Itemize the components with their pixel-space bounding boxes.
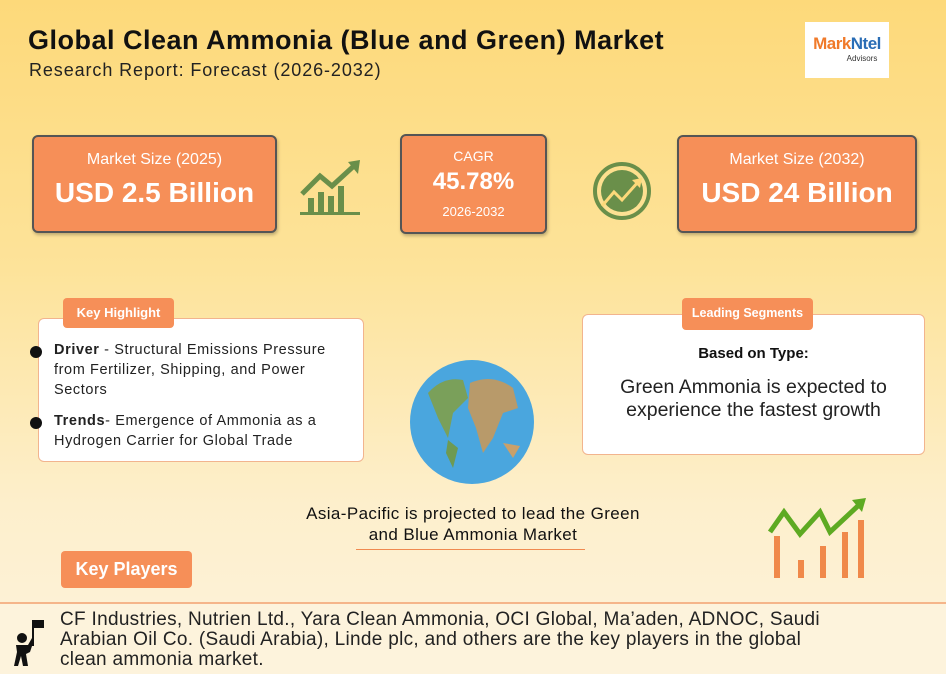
icon: person with flag	[14, 620, 44, 666]
stat box: CAGR: CAGR	[453, 148, 494, 164]
stat box: market size 2025	[32, 135, 277, 233]
icon: rising bars	[768, 498, 866, 578]
trends: Trends- Emergence of Ammonia as a	[54, 413, 316, 429]
tag: leading segments: Leading Segments	[692, 306, 803, 320]
stat box: CAGR: 45.78%	[433, 168, 514, 195]
region text: and Blue Ammonia Market	[369, 525, 577, 544]
bottom band	[0, 602, 946, 674]
stat box: market size 2032: Market Size (2032)	[729, 151, 865, 168]
title: Global Clean Ammonia (Blue and Green) Market	[28, 25, 664, 55]
logo: Advisors	[847, 54, 877, 63]
driver: from Fertilizer, Shipping, and Power	[54, 362, 305, 378]
key players text: CF Industries, Nutrien Ltd., Yara Clean Ammonia, OCI Global, Ma’aden, ADNOC, Saudi	[60, 609, 820, 630]
panel: leading segments: experience the fastest growth	[626, 399, 881, 421]
trends: Hydrogen Carrier for Global Trade	[54, 433, 293, 449]
button: key players: Key Players	[75, 559, 178, 579]
panel: leading segments: Green Ammonia is expected to	[620, 376, 887, 398]
tag: leading segments	[682, 298, 813, 330]
stat box: market size 2032	[677, 135, 917, 233]
icon: growth chart	[300, 160, 360, 215]
key players text: Arabian Oil Co. (Saudi Arabia), Linde plc, and others are the key players in the global	[60, 629, 801, 650]
stat box: market size 2032: USD 24 Billion	[701, 177, 893, 208]
key players text	[60, 609, 820, 670]
logo	[805, 22, 889, 78]
stat box: CAGR	[400, 134, 547, 234]
bullets	[30, 346, 42, 429]
region text	[306, 504, 640, 544]
key players text: clean ammonia market.	[60, 649, 264, 670]
driver	[54, 342, 326, 398]
stat box: market size 2025: Market Size (2025)	[87, 151, 222, 168]
driver: Driver - Structural Emissions Pressure	[54, 342, 326, 358]
icon: growth circle	[593, 162, 651, 220]
subtitle: Research Report: Forecast (2026-2032)	[29, 60, 381, 80]
region text: Asia-Pacific is projected to lead the Green	[306, 504, 640, 523]
tag: key highlight	[63, 298, 174, 328]
trends	[54, 413, 316, 449]
panel: leading segments	[582, 314, 925, 455]
driver: Sectors	[54, 382, 107, 398]
tag: key highlight: Key Highlight	[77, 305, 160, 320]
panel: key highlight	[38, 318, 364, 462]
globe	[410, 360, 534, 484]
panel: leading segments: Based on Type:	[698, 345, 809, 362]
stat box: market size 2025: USD 2.5 Billion	[55, 177, 254, 208]
button: key players	[61, 551, 192, 588]
logo: MarkNtel	[813, 34, 881, 53]
stat box: CAGR: 2026-2032	[442, 204, 505, 219]
